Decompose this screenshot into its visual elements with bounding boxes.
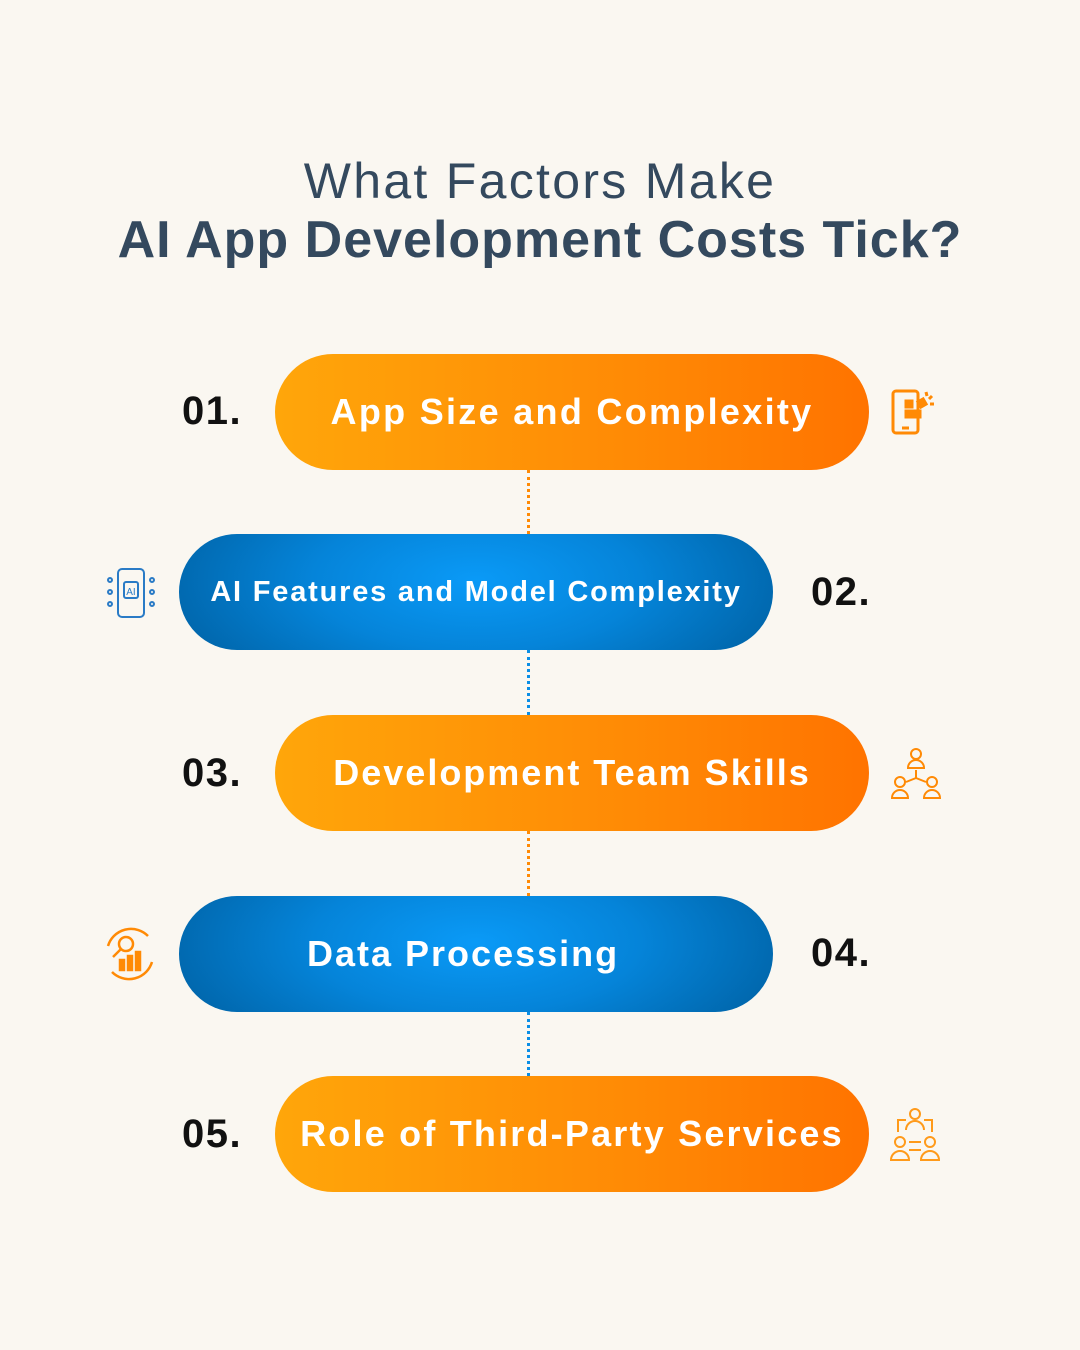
number 03: 03. xyxy=(182,751,242,795)
pill 1 xyxy=(275,354,869,470)
icon: AI phone xyxy=(107,568,155,618)
icon: AI phone: AI xyxy=(126,587,136,598)
pill 3: Development Team Skills xyxy=(333,752,811,793)
text: AI App Development Costs Tick? xyxy=(118,211,962,269)
icon: data processing xyxy=(106,928,154,980)
icon: third party people xyxy=(890,1108,940,1161)
number 01: 01. xyxy=(182,389,242,433)
pill 2: AI Features and Model Complexity xyxy=(210,576,742,608)
icon: team xyxy=(891,748,941,799)
text: What Factors Make xyxy=(304,153,776,209)
connector 4 xyxy=(527,1012,530,1076)
pill 3 xyxy=(275,715,869,831)
pill 1: App Size and Complexity xyxy=(331,391,813,432)
connector 3 xyxy=(527,831,530,896)
connector 1 xyxy=(527,470,530,534)
pill 5 xyxy=(275,1076,869,1192)
number 02: 02. xyxy=(811,570,871,614)
pill 4 xyxy=(179,896,773,1012)
pill 2 xyxy=(179,534,773,650)
pill 5: Role of Third-Party Services xyxy=(300,1113,844,1154)
icon: mobile blocks xyxy=(892,390,934,434)
title xyxy=(118,153,962,269)
pill 4: Data Processing xyxy=(307,933,619,974)
connector 2 xyxy=(527,650,530,715)
number 05: 05. xyxy=(182,1112,242,1156)
number 04: 04. xyxy=(811,931,871,975)
